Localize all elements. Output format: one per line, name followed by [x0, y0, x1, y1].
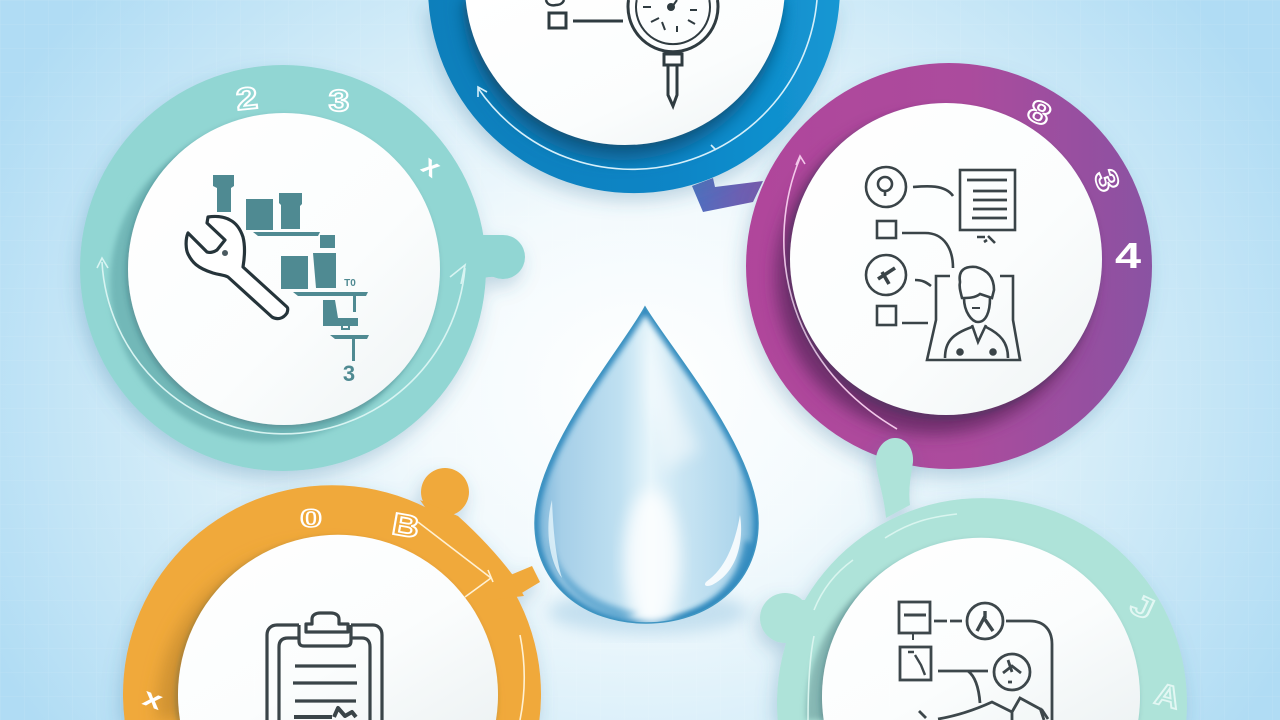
purple ring labels: 4	[1115, 235, 1141, 276]
teal inner shade	[110, 126, 426, 442]
icon: inspector checklist	[866, 167, 1020, 360]
bottom reflection right	[672, 540, 756, 625]
purple inner shade	[776, 118, 1092, 434]
purple progress arrow	[784, 156, 897, 429]
teal ring labels	[234, 81, 447, 184]
icon: pressure gauge	[546, 0, 718, 106]
mint white disc	[822, 538, 1140, 720]
mint ring labels: J	[1125, 588, 1159, 627]
blue ring	[428, 0, 840, 193]
icon: wrench and parts: T0	[344, 278, 356, 289]
orange white disc	[178, 535, 498, 720]
icon: operator diagram	[899, 602, 1052, 720]
highlight left	[548, 500, 562, 578]
purple ring	[746, 63, 1152, 469]
panel: teal step	[80, 65, 525, 471]
orange ring labels: B	[390, 507, 422, 545]
blue progress arrow	[478, 0, 817, 169]
teal ring	[80, 65, 525, 471]
purple ring labels	[1022, 93, 1141, 276]
teal ring labels: 3	[329, 84, 349, 118]
highlight right	[705, 515, 741, 586]
mint ring labels: A	[1151, 676, 1184, 716]
bottom reflection left	[548, 540, 640, 620]
icon: wrench and parts	[186, 175, 369, 386]
blue white disc	[466, 0, 784, 145]
purple ring labels: 3	[1087, 165, 1126, 196]
teal progress arrow	[97, 258, 465, 434]
icon: wrench and parts: 3	[343, 361, 355, 386]
water drop	[535, 307, 758, 634]
rim shading	[535, 307, 758, 623]
blue inner shade	[462, 0, 782, 160]
orange ring labels: 0	[300, 504, 322, 532]
panel: orange step	[123, 468, 541, 720]
teal white disc	[128, 113, 440, 425]
purple ring labels: 8	[1022, 93, 1056, 133]
icon: clipboard checklist	[267, 613, 382, 720]
orange inner shade	[157, 547, 487, 720]
upper glow	[651, 360, 700, 466]
mint inner shade	[806, 550, 1130, 720]
orange ring labels: x	[139, 683, 167, 716]
panel: blue step	[428, 0, 840, 212]
teal ring labels: 2	[234, 81, 259, 117]
teal ring labels: x	[416, 149, 447, 184]
centre glow	[624, 490, 680, 630]
orange ring	[123, 468, 541, 720]
mint ring	[760, 438, 1187, 720]
orange progress arrow	[418, 522, 524, 720]
mint ring labels	[1125, 588, 1184, 716]
orange ring labels	[139, 504, 422, 716]
purple white disc	[790, 103, 1102, 415]
panel: purple step	[746, 63, 1152, 469]
connector tab	[692, 178, 763, 212]
panel: mint step	[760, 438, 1187, 720]
mint progress arrow	[808, 514, 957, 720]
